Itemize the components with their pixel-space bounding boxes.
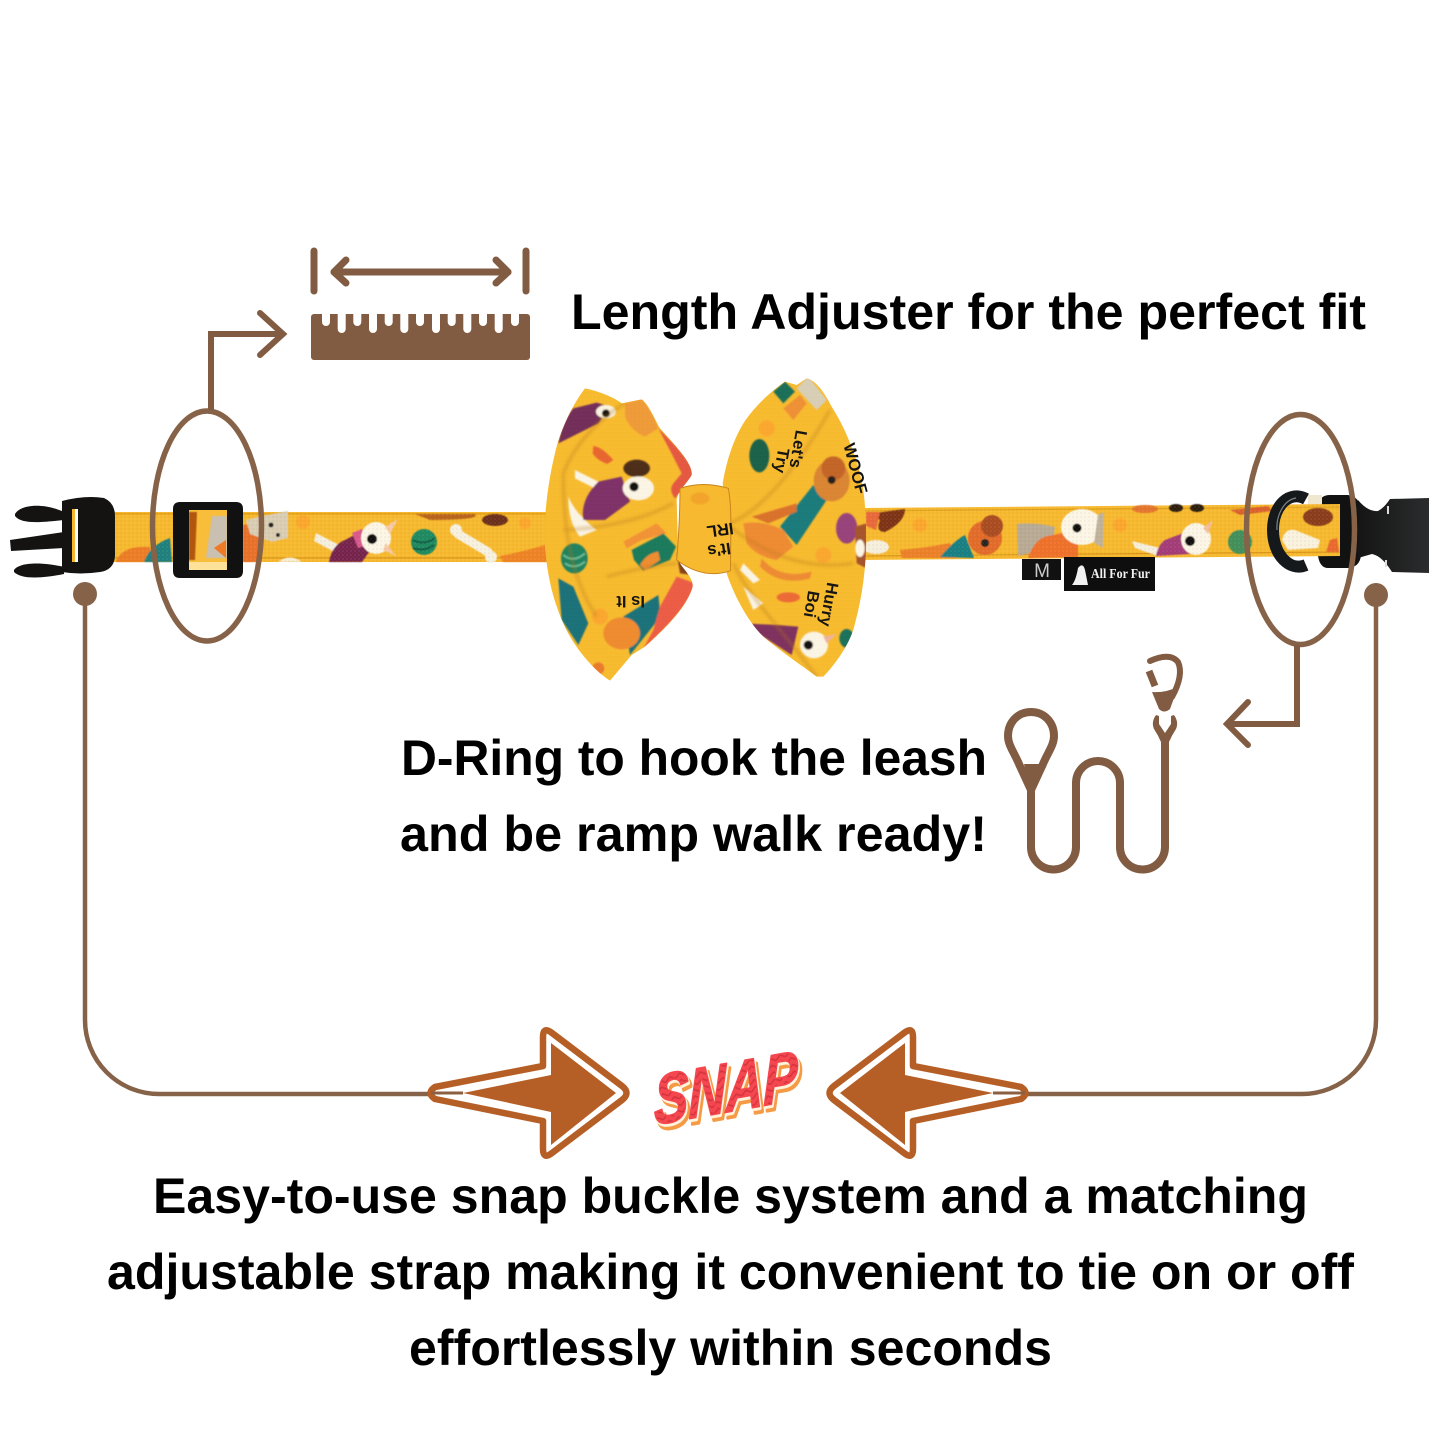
panel: collar left strap — [112, 511, 552, 563]
arrow: snap from right — [830, 1030, 1026, 1156]
icon: D-ring — [1273, 496, 1306, 567]
bow fabric weave — [545, 378, 866, 681]
connector line: right buckle to snap arrow — [1026, 583, 1388, 1094]
brand tag All For Fur — [1064, 557, 1155, 591]
text block: D-ring — [400, 729, 987, 862]
bow printed words: Hurry — [816, 581, 842, 629]
bow tie illustration — [545, 377, 871, 681]
callout ring: D-ring — [1246, 414, 1354, 644]
size tag M: M — [1034, 561, 1050, 582]
bow printed words: Boi — [800, 589, 823, 619]
text block: snap buckle description: adjustable strap making it convenient to tie on or off — [107, 1243, 1354, 1300]
bow fold shading — [563, 403, 853, 677]
icon: length adjuster slider — [173, 502, 243, 578]
knot shading — [691, 492, 709, 504]
arrow: D-ring to leash — [1227, 645, 1297, 745]
brand tag All For Fur: All For Fur — [1091, 567, 1150, 582]
connector line: left buckle to snap arrow — [73, 582, 432, 1094]
bow printed words: WOOF — [839, 441, 871, 496]
icon: leash — [1008, 657, 1180, 870]
bow printed words: Is It — [616, 592, 645, 611]
icon: male snap buckle — [10, 497, 115, 578]
text block: D-ring: and be ramp walk ready! — [400, 805, 987, 862]
text block: D-ring: D-Ring to hook the leash — [401, 729, 987, 786]
text block: snap buckle description: Easy-to-use snap buckle system and a matching — [153, 1167, 1308, 1224]
arrow: adjuster ring to ruler — [211, 313, 283, 410]
knot printed text — [706, 519, 735, 561]
bow centre knot — [677, 484, 731, 574]
icon: ruler with measure arrow — [311, 251, 530, 360]
heading: length adjuster: Length Adjuster for the perfect fit — [571, 283, 1366, 340]
panel: female buckle back — [1308, 495, 1429, 573]
bow printed words: Let's — [785, 429, 811, 470]
knot printed text: IRL — [706, 519, 735, 541]
snap wordmark: SNAP — [654, 1035, 798, 1140]
knot printed text: It's — [706, 539, 732, 561]
text block: snap buckle description — [107, 1167, 1354, 1376]
bow printed words — [616, 429, 871, 629]
panel: collar right strap — [860, 504, 1340, 560]
bow printed words: Try — [770, 447, 793, 475]
bow base shape — [545, 378, 866, 681]
bow printed pattern — [558, 377, 867, 677]
text block: snap buckle description: effortlessly within seconds — [409, 1319, 1052, 1376]
callout ring: length adjuster — [152, 411, 262, 641]
snap wordmark: SNAP — [655, 1037, 799, 1142]
snap wordmark: SNAP — [657, 1040, 801, 1145]
arrow: snap from left — [430, 1030, 626, 1156]
size tag M — [1022, 559, 1061, 582]
